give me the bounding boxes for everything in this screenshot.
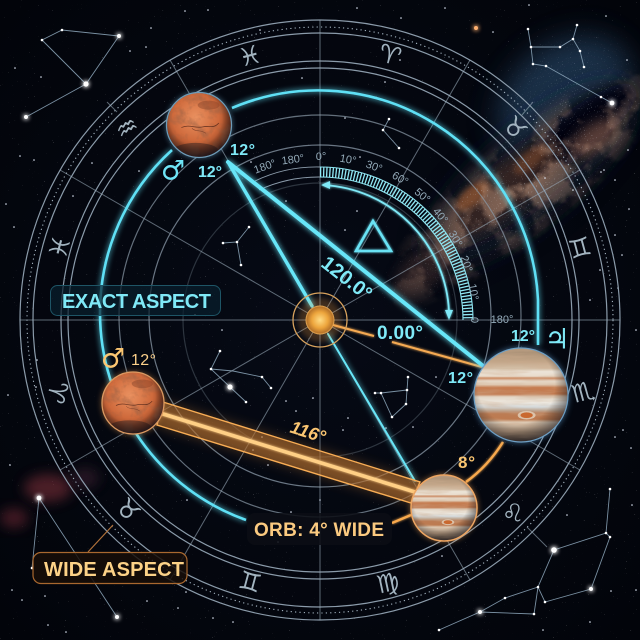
- degree scale: 40°: [430, 206, 450, 226]
- degree scale: 10°: [466, 283, 480, 301]
- degree scale: 20°: [458, 254, 474, 274]
- Mars exact labels: [161, 142, 255, 186]
- zodiac glyphs: ♉︎: [497, 110, 533, 146]
- orange orb line from sun to Jupiter: [333, 325, 482, 367]
- degree scale: 30°: [446, 229, 464, 249]
- zodiac glyphs: ♊︎: [565, 231, 595, 265]
- degree scale: 50°: [412, 186, 432, 206]
- zodiac glyphs: ♌︎: [502, 498, 524, 528]
- callout: wide aspect: [33, 552, 187, 584]
- Jupiter exact labels: [448, 322, 570, 387]
- zodiac glyphs: ♈︎: [40, 377, 74, 407]
- sun: [293, 293, 347, 347]
- milky way nebula: [387, 23, 640, 310]
- degree scale: 180°: [491, 314, 513, 326]
- planet: Mars exact: [166, 92, 232, 158]
- zodiac glyphs: ♉︎: [110, 492, 146, 528]
- measuring arrow arc: [321, 181, 453, 320]
- Mars exact labels: 12°: [230, 142, 255, 159]
- Jupiter exact labels: 12°: [511, 328, 535, 345]
- planet: Jupiter wide: [410, 474, 478, 542]
- degree scale: 30°: [364, 159, 384, 175]
- Mars exact labels: 12°: [198, 164, 222, 181]
- zodiac glyphs: ♒︎: [110, 110, 144, 146]
- Mars exact labels: ♂︎: [161, 156, 185, 186]
- zodiac glyphs: ♏︎: [568, 375, 598, 409]
- trine triangle symbol: [356, 221, 391, 251]
- callout: orb: [247, 513, 392, 545]
- callout: wide aspect: WIDE ASPECT: [44, 559, 184, 581]
- exact aspect lines: [228, 162, 482, 481]
- angle label 0.00: 0.00°: [377, 323, 423, 344]
- Mars wide labels: 12°: [131, 352, 156, 369]
- zodiac glyphs: ♊︎: [235, 565, 265, 599]
- Jupiter wide orb degree: 8°: [458, 453, 475, 472]
- callout: exact aspect: [50, 286, 220, 316]
- degree scale: 180°: [252, 157, 278, 177]
- degree scale: 0: [468, 317, 480, 323]
- zodiac glyphs: ♍︎: [374, 566, 402, 600]
- callout: orb: ORB: 4° WIDE: [254, 520, 384, 541]
- zodiac glyphs: ♈︎: [375, 38, 405, 72]
- Jupiter exact labels: 12°: [448, 370, 473, 387]
- Mars wide labels: ♂︎: [101, 344, 125, 374]
- planet: Mars wide: [101, 371, 165, 435]
- angle label 116: 116°: [288, 417, 329, 447]
- callout: exact aspect: EXACT ASPECT: [62, 291, 211, 313]
- angle label 120.0: 120.0°: [317, 252, 376, 305]
- planet: Jupiter exact: [473, 347, 569, 443]
- zodiac glyphs: ♓︎: [235, 39, 265, 73]
- degree scale: 0°: [316, 151, 326, 163]
- wide aspect orange orbit arc: [392, 442, 503, 523]
- zodiac glyphs: [40, 38, 598, 600]
- degree scale: 60°: [390, 170, 410, 188]
- degree scale: 10°: [339, 153, 357, 167]
- exact aspect blue orbit arc: [100, 90, 538, 520]
- red nebula lower left: [0, 468, 99, 528]
- Jupiter exact labels: ♃︎: [544, 322, 570, 356]
- wide aspect orange band: [157, 402, 420, 503]
- zodiac glyphs: ♓︎: [43, 232, 77, 262]
- Mars wide labels: [101, 344, 156, 374]
- degree scale: 180°: [281, 152, 305, 168]
- degree scale: [252, 151, 513, 326]
